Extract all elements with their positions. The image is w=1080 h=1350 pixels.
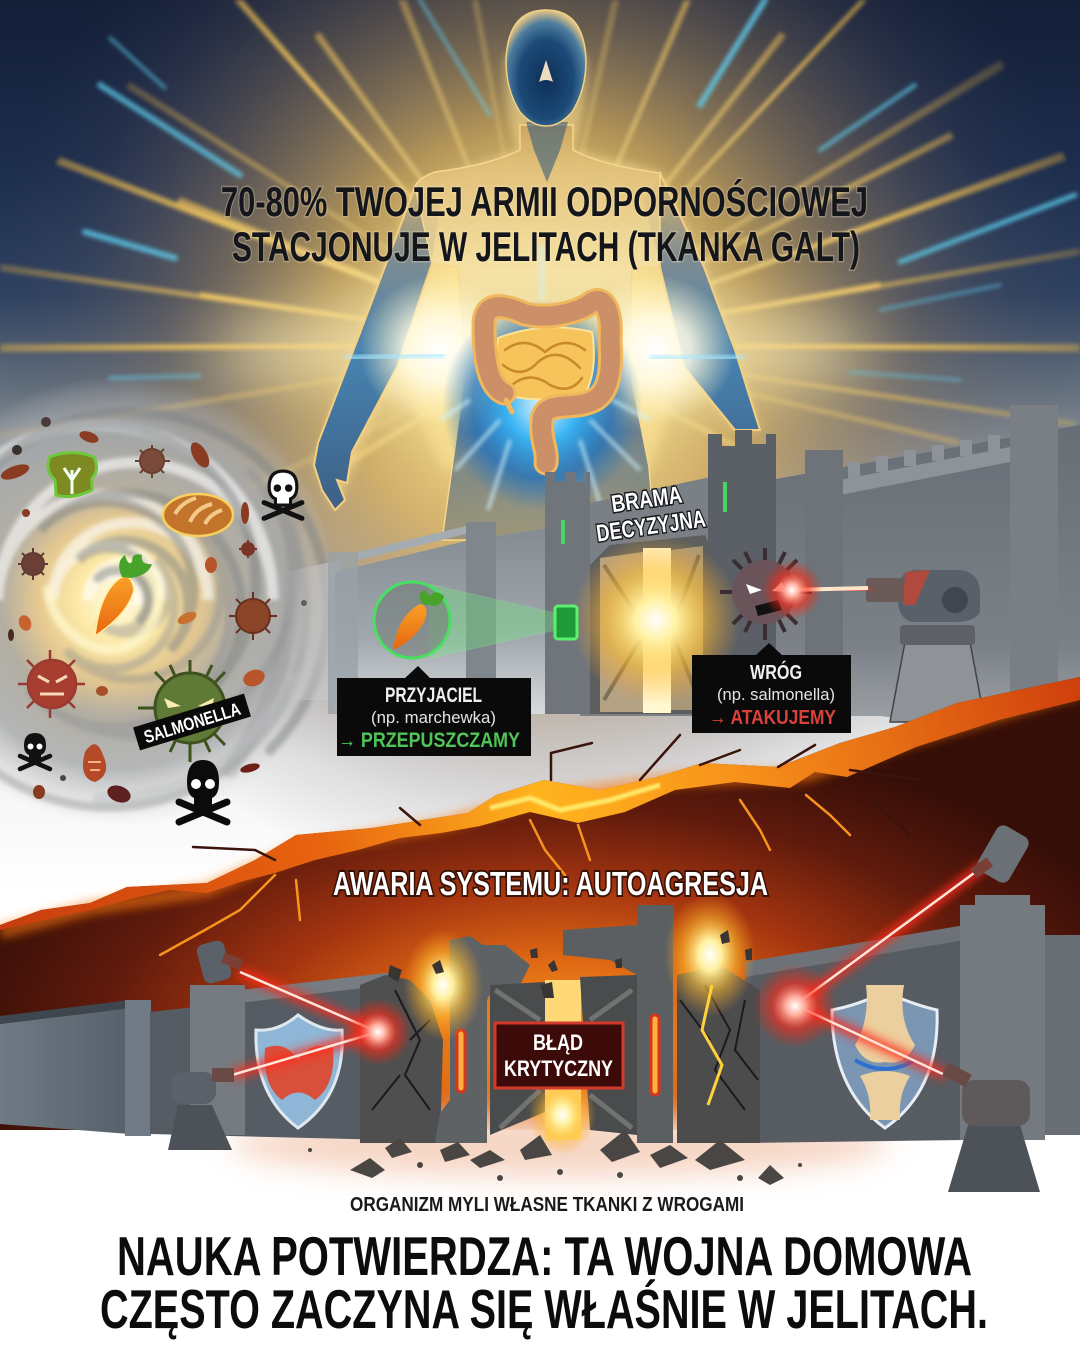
icon: skull bottom [179, 760, 227, 822]
arm flares [345, 355, 745, 358]
right gate wall and tower [563, 905, 673, 1143]
lava band [0, 677, 1080, 930]
right pilasters [805, 450, 843, 718]
turret: bottom right [942, 1063, 1040, 1192]
lava glow [0, 690, 1080, 932]
bottom headline [100, 1225, 988, 1340]
human figure [314, 10, 760, 540]
salmonella label: SALMONELLA [142, 699, 243, 747]
icon: small blob [83, 744, 106, 782]
colon body [484, 301, 611, 463]
left wall section [335, 528, 548, 714]
icon: virus left [18, 548, 48, 580]
door [590, 535, 712, 714]
glowing slits [457, 1030, 465, 1092]
caption: ORGANIZM MYLI WŁASNE TKANKI Z WROGAMI [350, 1194, 744, 1216]
lasers lower [232, 865, 985, 1075]
right main wall [770, 425, 1080, 740]
blue core glow [442, 300, 642, 510]
shield: joint [832, 985, 937, 1128]
title: 70-80% TWOJEJ ARMII ODPORNOŚCIOWEJ [221, 177, 868, 225]
label: friend: → PRZEPUSZCZAMY [338, 729, 520, 752]
right tower [960, 895, 1045, 1140]
gate label [591, 479, 707, 548]
label: enemy: WRÓG [750, 660, 802, 684]
icon: red virus [18, 650, 85, 718]
turret head [898, 570, 980, 622]
carrot circle [374, 582, 450, 658]
green indicators [561, 482, 727, 544]
rubble [308, 1130, 802, 1185]
far left wall [0, 1008, 130, 1134]
colon outline [484, 301, 611, 463]
left door braces [495, 990, 540, 1128]
green button [555, 606, 577, 639]
cracks [372, 985, 758, 1110]
vortex base [0, 368, 334, 832]
green scan beam [430, 585, 562, 658]
damaged wall lower [0, 893, 1080, 1155]
right door braces [590, 990, 632, 1128]
torso [415, 125, 660, 540]
left door [490, 982, 545, 1135]
shield: thyroid [256, 1015, 342, 1128]
left wall parapet [0, 1000, 130, 1024]
side glows [360, 275, 520, 425]
enemy virus [720, 548, 812, 640]
left main wall [150, 985, 390, 1140]
gate light [643, 548, 671, 713]
intestines [484, 301, 611, 463]
face [539, 60, 553, 82]
icon: carrot [95, 554, 152, 636]
label: critical error: KRYTYCZNY [504, 1056, 613, 1081]
left gate tower [545, 472, 590, 714]
friend: carrot scan [374, 582, 577, 658]
icon: virus top [135, 445, 170, 478]
laser upper [762, 560, 868, 620]
icon: virus small [239, 540, 257, 558]
dark lower panel [0, 677, 1080, 1145]
left tower [190, 985, 245, 1135]
golden glow behind figure [0, 0, 1080, 950]
label: enemy: (np. salmonella) [717, 685, 835, 704]
right cracked wall [677, 965, 760, 1143]
left wall parapet [358, 526, 466, 560]
small intestine coils [503, 343, 585, 389]
lava crack [0, 677, 1080, 955]
lightning crack [702, 985, 722, 1105]
appendix [506, 400, 512, 412]
icon: green virus [138, 660, 244, 762]
fortress wall upper [285, 405, 1080, 740]
lava bright core [490, 785, 660, 810]
turret: top left [195, 939, 244, 985]
right gate tower [708, 430, 776, 680]
icon: skull lower left [20, 733, 50, 769]
title [221, 177, 868, 270]
icon: virus right [229, 592, 277, 640]
turret upper [866, 570, 985, 722]
label: critical error [495, 1023, 623, 1088]
gate label: DECYZYJNA [595, 505, 707, 548]
head [506, 10, 586, 126]
far right wall [1045, 935, 1080, 1135]
small intestine [496, 327, 594, 400]
small carrot [393, 604, 427, 650]
label: friend [337, 666, 531, 756]
right arm [642, 173, 760, 430]
icon: toast [48, 452, 97, 497]
left gate tower [435, 936, 530, 1143]
vortex bands [0, 412, 328, 807]
figure rim glow [314, 30, 760, 510]
turret base [890, 642, 985, 722]
failure heading: AWARIA SYSTEMU: AUTOAGRESJA [333, 865, 768, 902]
neck shading [526, 122, 568, 182]
ground [0, 1113, 1080, 1350]
icon: bread [163, 494, 233, 536]
turret: top right [970, 822, 1032, 886]
dark crack branches [193, 735, 920, 860]
cyan streaks [85, 0, 1075, 380]
left pilasters [328, 552, 358, 714]
horizontal burst [210, 300, 870, 400]
gate glow behind [545, 980, 581, 1140]
debris beans [0, 417, 307, 806]
ground warm tint [230, 1113, 890, 1177]
gate label: BRAMA [610, 482, 684, 518]
blue core spikes [440, 245, 650, 510]
far wall [285, 560, 340, 700]
label: friend: PRZYJACIEL [385, 684, 482, 707]
turret: bottom left [168, 1068, 234, 1150]
door braces [604, 555, 699, 700]
orange crack branches [160, 795, 850, 955]
label: critical error: BŁĄD [533, 1030, 583, 1055]
left arm [314, 187, 442, 510]
right main wall [745, 930, 965, 1143]
label: friend: (np. marchewka) [371, 708, 496, 727]
flying debris [388, 930, 752, 998]
icon: skull top right [264, 471, 302, 518]
gate frame [580, 475, 720, 716]
light rays [0, 0, 1080, 508]
turret barrel [866, 578, 904, 602]
right door [580, 975, 637, 1135]
label: enemy [692, 643, 851, 733]
label: enemy: → ATAKUJEMY [709, 707, 837, 729]
explosion glow [664, 893, 756, 1017]
left cracked wall [360, 975, 443, 1143]
food vortex [0, 368, 334, 832]
